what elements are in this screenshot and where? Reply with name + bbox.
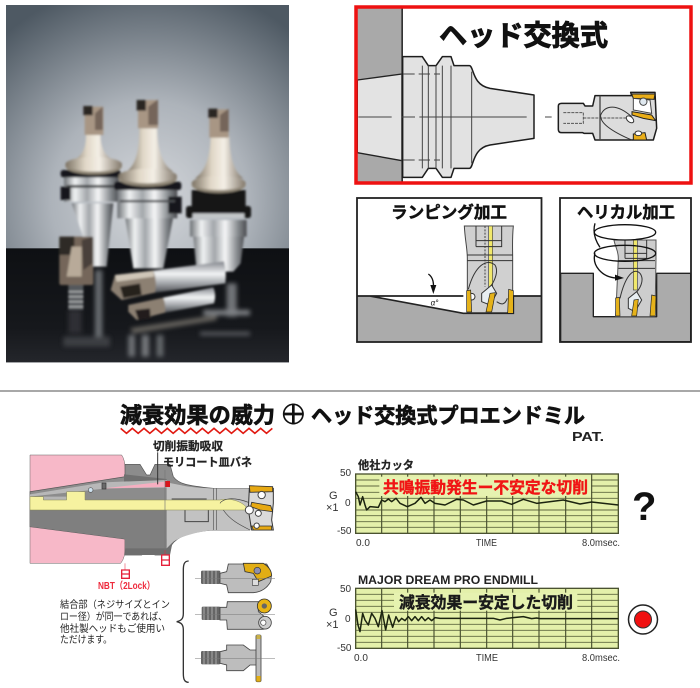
head: disc cutter <box>195 635 275 682</box>
heading: helical: ヘリカル加工 <box>577 203 675 222</box>
chart callout: stable cutting: 減衰効果ー安定した切削 <box>399 593 573 612</box>
machine wall <box>356 7 403 184</box>
axis labels: ×1 <box>326 502 339 514</box>
small detached head <box>59 237 93 310</box>
compatible heads <box>195 563 275 682</box>
axis labels: 8.0msec. <box>582 538 620 549</box>
axis labels: TIME <box>476 653 498 664</box>
vibration trace <box>356 492 618 510</box>
chart: other company's cutter <box>326 458 620 549</box>
text block: compatibility note: ロー径）が同一であれば、 <box>60 610 167 623</box>
axis labels: -50 <box>337 526 352 537</box>
workpiece with pocket <box>561 273 691 342</box>
heading: ヘッド交換式 <box>439 20 608 51</box>
holder body <box>403 57 534 177</box>
holder right <box>186 109 251 272</box>
axis labels <box>326 468 620 549</box>
axis labels: 50 <box>340 584 352 595</box>
chart: major dream pro endmill <box>326 573 620 664</box>
holder flange <box>30 464 250 555</box>
spring <box>165 481 170 487</box>
pink spindle <box>30 455 125 563</box>
ramp angle arrow <box>428 274 438 307</box>
ramp angle arrow: α° <box>431 298 438 307</box>
cross-section of holder and cutter <box>30 452 273 563</box>
frame: helical <box>560 198 691 342</box>
text block: compatibility note: 結合部（ネジサイズとイン <box>60 598 170 611</box>
end mill upper <box>111 261 226 300</box>
holder left <box>61 106 122 267</box>
reflections on the table <box>63 270 250 357</box>
red wavy underline <box>121 428 272 433</box>
section title: 減衰効果の威力 <box>120 403 275 428</box>
axis labels: G <box>329 490 338 502</box>
icon: double circle mark <box>628 605 658 634</box>
icon: red dimension marks <box>122 550 169 578</box>
label: vibration absorption: 切削振動吸収 <box>153 439 224 453</box>
replaceable cutter head <box>558 92 657 140</box>
holder center <box>114 99 182 268</box>
cutter head <box>245 486 273 530</box>
head: round insert <box>195 599 275 629</box>
axis labels: 0.0 <box>354 653 368 664</box>
heading: ramping: ランピング加工 <box>391 202 507 222</box>
axis labels: 0 <box>345 614 351 625</box>
cutter in pocket <box>614 240 656 317</box>
end mill lower <box>128 287 215 320</box>
text block: compatibility note: ただけます。 <box>60 634 112 646</box>
workpiece with ramp <box>357 296 542 342</box>
damped vibration trace <box>356 609 618 632</box>
frame: ramping <box>357 198 542 342</box>
section title <box>120 403 585 433</box>
leader line <box>156 452 159 484</box>
plus symbol <box>283 404 304 424</box>
inner body <box>30 492 167 510</box>
axis labels: 50 <box>340 468 352 479</box>
axis labels: -50 <box>337 643 352 654</box>
title right part: ヘッド交換式プロエンドミル <box>311 405 585 428</box>
upper sleeve <box>30 480 167 497</box>
axis labels: 0.0 <box>356 538 370 549</box>
panel: ramping process <box>357 198 542 342</box>
chart title: MAJOR DREAM PRO ENDMILL <box>358 573 538 587</box>
brace <box>177 561 189 682</box>
panel: head-exchange schematic <box>356 7 691 184</box>
helical path arrow <box>594 223 656 281</box>
text block: compatibility note <box>60 598 170 646</box>
axis labels: G <box>329 607 338 619</box>
axis labels: ×1 <box>326 619 339 631</box>
text block: compatibility note: 他社製ヘッドもご使用い <box>60 622 165 635</box>
patent label: PAT. <box>572 430 604 444</box>
head: ball nose <box>195 563 275 593</box>
axis labels: 0 <box>345 498 351 509</box>
red frame <box>356 7 691 183</box>
chart callout: unstable cutting: 共鳴振動発生ー不安定な切削 <box>383 478 588 497</box>
axis labels: TIME <box>476 538 497 549</box>
icon: question mark: ? <box>632 485 656 529</box>
yellow coolant channel <box>30 492 248 510</box>
panel: product photo of tool holders <box>6 5 289 362</box>
cutter in ramp <box>464 226 513 313</box>
panel: helical process <box>560 198 691 342</box>
label: NBT 2Lock: NBT（2Lock） <box>98 580 155 592</box>
axis labels <box>326 584 620 664</box>
label: molycoat disc spring: モリコート皿バネ <box>163 456 252 469</box>
chart title: 他社カッタ <box>358 458 414 472</box>
axis labels: 8.0msec. <box>582 653 620 664</box>
